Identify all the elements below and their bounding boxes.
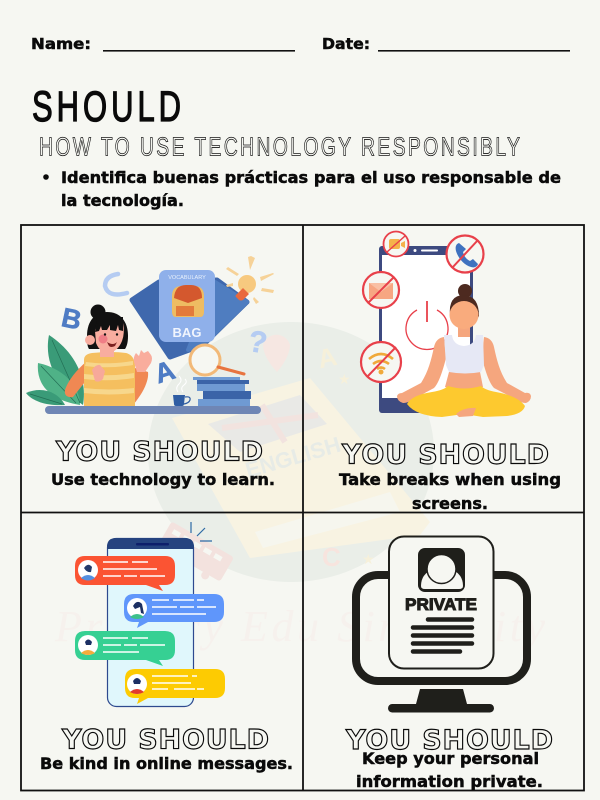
grid table borders [21, 225, 584, 790]
caption: take breaks [339, 470, 561, 513]
icon: private document [389, 536, 494, 668]
heading: you should 2: YOU SHOULD [341, 440, 549, 470]
icon: rays [191, 522, 212, 541]
icon: letters [59, 274, 270, 389]
icon: no mail [363, 272, 399, 308]
subtitle: HOW TO USE TECHNOLOGY RESPONSIBLY [39, 132, 520, 161]
caption: be kind online: Be kind in online messages. [40, 754, 293, 773]
background watermark: English book badge: A [315, 341, 340, 374]
illustration: private document on monitor [356, 536, 527, 712]
icon: meditating woman [397, 284, 531, 417]
learning objective: Identifica buenas prácticas para el uso responsable de [61, 168, 561, 187]
heading: you should 4: YOU SHOULD [345, 725, 553, 756]
icon: coffee cup [173, 376, 190, 406]
heading: you should 3: YOU SHOULD [61, 724, 269, 756]
watermark text: Primary Edu Simplicity [54, 602, 545, 651]
date field: Date: [322, 35, 370, 53]
name field: Name: [31, 35, 91, 53]
icon: letters: A [151, 355, 179, 389]
watermark bus [155, 521, 234, 587]
caption: keep information private [356, 749, 543, 791]
icon: phone [379, 246, 473, 413]
illustration: meditating near phone [361, 232, 531, 417]
title: SHOULD [32, 82, 181, 130]
message bubble yellow [125, 669, 225, 704]
background watermark: English book badge [148, 322, 434, 587]
icon: vocabulary cards [132, 270, 247, 357]
illustration: kind chat messages [75, 522, 225, 706]
desk [45, 406, 261, 414]
icon: vocabulary cards: VOCABULARY [168, 275, 206, 281]
icon: magnifying glass [190, 345, 244, 375]
caption: take breaks: screens. [412, 494, 488, 513]
icon: light bulb [226, 256, 274, 304]
message bubble green [75, 631, 175, 666]
icon: no phone calls [446, 236, 484, 272]
icon: letters: ? [246, 325, 270, 361]
learning objective [43, 168, 561, 210]
heading: you should 1: YOU SHOULD [55, 436, 263, 468]
caption: keep information private: information private. [356, 772, 543, 791]
icon: no video [384, 232, 408, 256]
icon: leaves [26, 335, 84, 405]
icon: letters: B [59, 302, 84, 336]
icon: private document: PRIVATE [405, 596, 477, 614]
caption: use technology to learn: Use technology to learn. [51, 470, 275, 489]
caption: take breaks: Take breaks when using [339, 470, 561, 489]
icon: book stack [193, 377, 251, 407]
background watermark: English book badge: ★ [362, 552, 375, 568]
icon: vocabulary cards: BAG [173, 325, 201, 340]
message bubble red [75, 556, 175, 591]
learning objective: la tecnología. [61, 191, 184, 210]
caption: keep information private: Keep your personal [362, 749, 539, 768]
icon: monitor [356, 575, 527, 712]
illustration: girl learning vocabulary [26, 256, 274, 414]
background watermark: English book badge: C [322, 542, 341, 572]
background watermark: English book badge: ENGLISH [242, 432, 343, 483]
icon: no wifi [361, 342, 401, 382]
background watermark: English book badge: ★ [338, 372, 351, 388]
icon: girl [65, 304, 152, 406]
icon: power symbol [406, 301, 448, 349]
icon: phone [107, 538, 194, 706]
message bubble blue [124, 594, 224, 628]
